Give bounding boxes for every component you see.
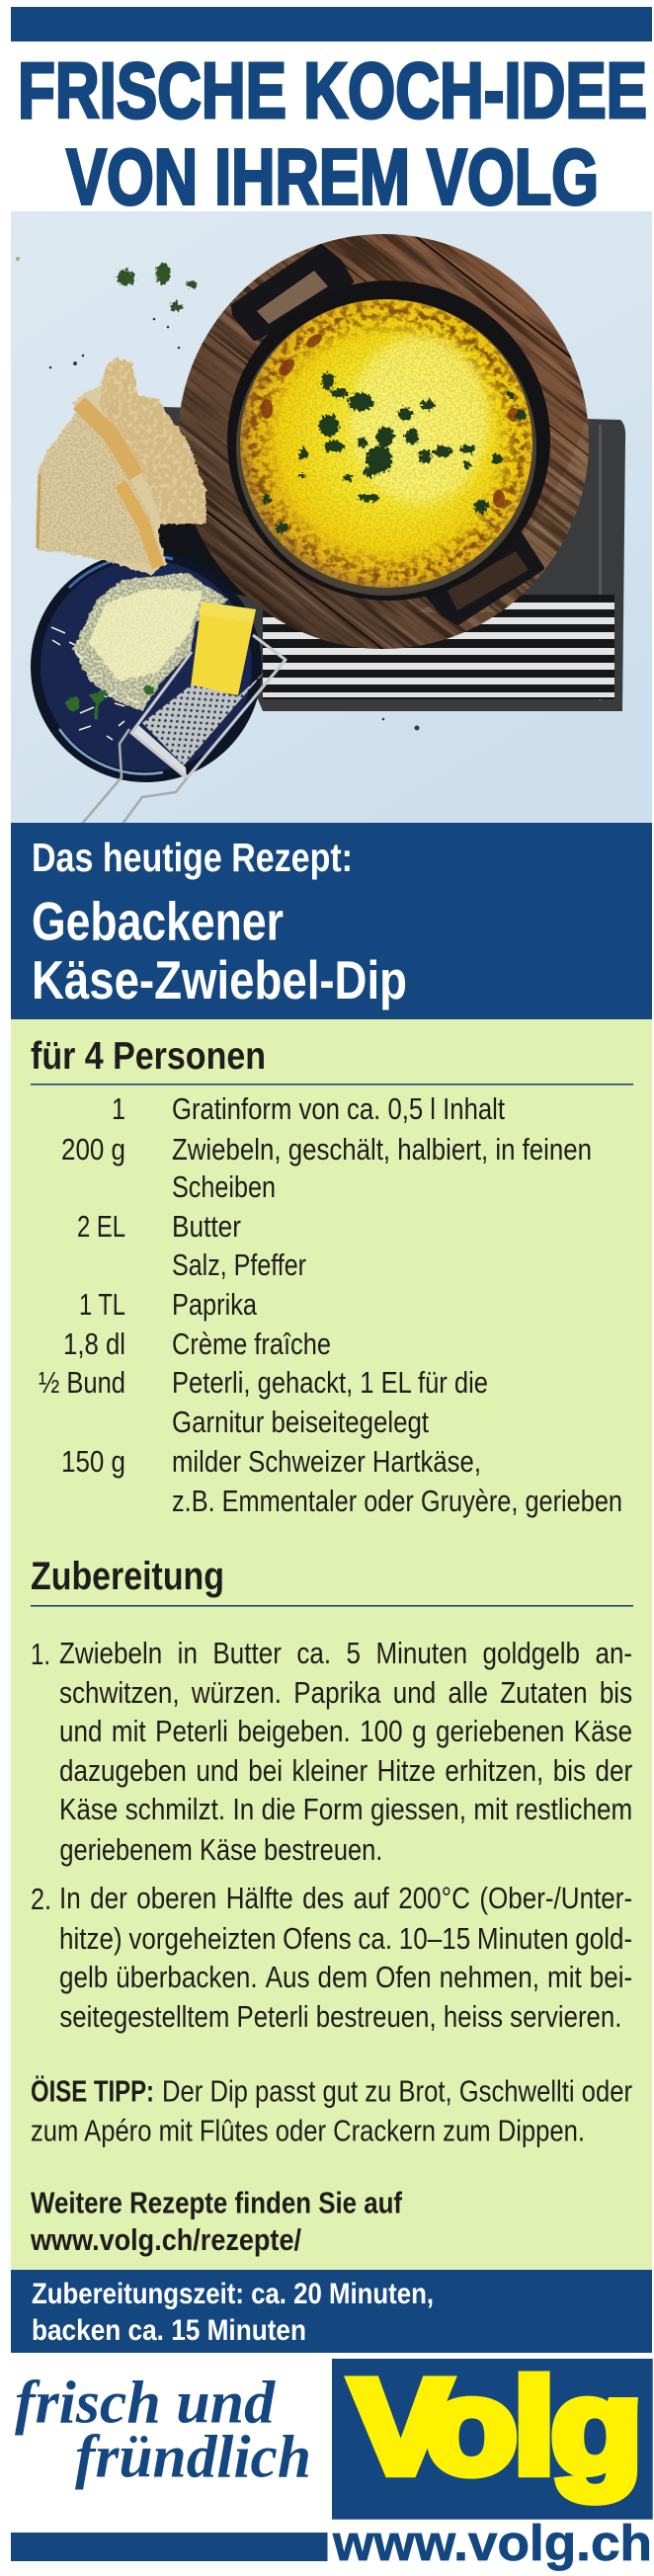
- recipe infographic page: oberen: [137, 1881, 217, 1915]
- recipe infographic page: schmilzt.: [125, 1792, 225, 1826]
- ingredient list: 2 EL: [77, 1209, 125, 1244]
- ingredient list: Paprika: [172, 1287, 258, 1322]
- recipe infographic page: 200°C: [399, 1881, 470, 1915]
- recipe infographic page: bei: [249, 1753, 283, 1788]
- ingredient list: milder Schweizer Hartkäse,: [172, 1444, 481, 1479]
- loose parsley: [117, 263, 197, 311]
- recipe infographic page: g: [412, 1714, 427, 1748]
- photo: baked cheese and onion dip: [11, 211, 652, 823]
- recipe infographic page: goldgelb: [483, 1636, 580, 1670]
- recipe infographic page: der: [91, 1881, 127, 1915]
- step numbers and closing lines: 2.: [31, 1882, 51, 1916]
- recipe infographic page: Ofens: [284, 1921, 352, 1956]
- recipe infographic page: des: [303, 1881, 345, 1915]
- recipe infographic page: mit: [112, 1714, 146, 1748]
- recipe infographic page: bis: [600, 1675, 633, 1710]
- recipe infographic page: bis: [553, 1753, 586, 1788]
- panel: preparation time: Zubereitungszeit: ca. 20 Minuten,: [32, 2278, 434, 2310]
- recipe infographic page: In: [233, 1792, 255, 1826]
- recipe infographic page: 5: [347, 1636, 361, 1670]
- pan handles: [234, 247, 541, 622]
- grated cheese: [51, 573, 228, 740]
- plate parsley: [66, 685, 153, 719]
- top blue bar: [11, 7, 652, 41]
- recipe infographic page: In: [59, 1881, 81, 1915]
- recipe infographic page: vorgeheizten: [129, 1921, 277, 1956]
- ingredient list: ½ Bund: [39, 1365, 125, 1400]
- recipe infographic page: Hälfte: [226, 1881, 293, 1915]
- recipe infographic page: mit: [547, 1960, 582, 1994]
- recipe infographic page: Zwiebeln: [59, 1636, 163, 1670]
- recipe infographic page: dem: [318, 1960, 368, 1994]
- panel: preparation time: [11, 2270, 652, 2353]
- heading: for 4 persons: für 4 Personen: [31, 1035, 266, 1078]
- parsley on dip: [263, 372, 526, 533]
- more recipes link: Weitere Rezepte finden Sie auf: [31, 2186, 403, 2220]
- recipe infographic page: mit: [474, 1792, 508, 1826]
- more recipes link: [30, 2186, 403, 2257]
- recipe infographic page: überbacken.: [117, 1960, 258, 1994]
- website: www.volg.ch: [332, 2515, 652, 2571]
- recipe name: Käse-Zwiebel-Dip: [32, 949, 407, 1010]
- recipe infographic page: gelb: [59, 1960, 109, 1994]
- recipe infographic page: und: [197, 1753, 239, 1788]
- recipe infographic page: Ofen: [376, 1960, 432, 1994]
- recipe infographic page: Käse: [59, 1792, 119, 1826]
- step numbers and closing lines: 1.: [31, 1637, 50, 1671]
- recipe infographic page: 10–15: [399, 1921, 471, 1956]
- recipe infographic page: Aus: [266, 1960, 310, 1994]
- recipe infographic page: restlichem: [516, 1792, 633, 1826]
- recipe infographic page: Zutaten: [501, 1675, 588, 1710]
- text block: preparation step 2: [59, 1881, 633, 1994]
- step numbers and closing lines: geriebenem Käse bestreuen.: [59, 1832, 382, 1867]
- ingredient list: 1 TL: [79, 1287, 125, 1322]
- recipe infographic page: alle: [449, 1675, 488, 1710]
- recipe infographic page: Butter: [213, 1636, 282, 1670]
- slogan: fründlich: [75, 2424, 311, 2490]
- grater: [82, 635, 286, 824]
- kicker: Das heutige Rezept:: [32, 835, 353, 880]
- recipe infographic page: kleiner: [292, 1753, 368, 1788]
- recipe infographic page: auf: [354, 1881, 389, 1915]
- recipe infographic page: in: [178, 1636, 198, 1670]
- wooden board: [178, 234, 589, 649]
- recipe infographic page: würzen.: [192, 1675, 282, 1710]
- ingredient list: Salz, Pfeffer: [172, 1248, 306, 1282]
- panel: recipe title: [11, 823, 652, 1019]
- panel: green recipe background: [11, 1019, 652, 2270]
- ingredient list: Garnitur beiseitegelegt: [172, 1405, 429, 1439]
- ingredient list: Crème fraîche: [172, 1327, 331, 1361]
- recipe infographic page: Peterli: [155, 1714, 228, 1748]
- recipe infographic page: der: [596, 1753, 633, 1788]
- recipe infographic page: und: [393, 1675, 437, 1710]
- recipe infographic page: Minuten: [376, 1636, 467, 1670]
- more recipes link: www.volg.ch/rezepte/: [30, 2222, 301, 2257]
- ingredient list: 1,8 dl: [63, 1327, 125, 1361]
- recipe infographic page: schwitzen,: [59, 1675, 180, 1710]
- title: [18, 46, 647, 221]
- pan: [227, 281, 550, 601]
- recipe infographic page: und: [59, 1714, 103, 1748]
- slogan: [15, 2371, 311, 2490]
- tip: ÖISE TIPP:: [31, 2074, 154, 2109]
- recipe infographic page: 100: [361, 1714, 403, 1748]
- bottom blue bar: [11, 2533, 328, 2561]
- recipe infographic page: Form: [303, 1792, 364, 1826]
- recipe infographic page: beigeben.: [238, 1714, 351, 1748]
- text block: preparation step 1: [59, 1636, 633, 1826]
- recipe infographic page: bei-: [590, 1960, 633, 1994]
- recipe name: [32, 891, 407, 1010]
- recipe infographic page: die: [262, 1792, 296, 1826]
- napkin: [163, 407, 625, 711]
- ingredient list: Peterli, gehackt, 1 EL für die: [172, 1365, 488, 1400]
- recipe infographic page: erhitzen,: [446, 1753, 544, 1788]
- ingredient list: [39, 1091, 622, 1518]
- ingredient list: 200 g: [61, 1132, 125, 1167]
- shadow beside bread: [158, 523, 247, 597]
- slogan: frisch und: [15, 2371, 277, 2437]
- step numbers and closing lines: [31, 1637, 621, 2034]
- ingredient list: Scheiben: [172, 1169, 276, 1204]
- recipe infographic page: hitze): [59, 1921, 123, 1956]
- recipe infographic page: (Ober-/Unter-: [480, 1881, 633, 1915]
- cheese block: [191, 602, 256, 695]
- recipe infographic page: ca.: [359, 1921, 392, 1956]
- plate: [31, 551, 262, 782]
- ingredient list: Butter: [172, 1209, 241, 1244]
- recipe infographic page: Käse: [574, 1714, 633, 1748]
- ingredient list: 150 g: [61, 1444, 125, 1479]
- ingredient list: 1: [112, 1091, 125, 1126]
- recipe infographic page: geriebenen: [436, 1714, 565, 1748]
- pepper specks: [16, 257, 419, 731]
- dip surface: [240, 299, 532, 588]
- recipe infographic page: giessen,: [370, 1792, 466, 1826]
- recipe name: Gebackener: [32, 891, 284, 952]
- bread: [37, 359, 205, 575]
- recipe infographic page: gold-: [576, 1921, 633, 1956]
- recipe infographic page: an-: [596, 1636, 632, 1670]
- recipe infographic page: nehmen,: [440, 1960, 539, 1994]
- panel: preparation time: backen ca. 15 Minuten: [32, 2314, 306, 2347]
- recipe infographic page: ca.: [297, 1636, 331, 1670]
- recipe infographic page: Paprika: [294, 1675, 381, 1710]
- recipe infographic page: Hitze: [377, 1753, 436, 1788]
- tip: [31, 2074, 632, 2148]
- recipe infographic page: dazugeben: [59, 1753, 187, 1788]
- recipe infographic page: Minuten: [477, 1921, 569, 1956]
- ingredient list: Gratinform von ca. 0,5 l Inhalt: [172, 1091, 505, 1126]
- logo: Volg: Volg: [351, 2353, 642, 2501]
- heading: preparation: Zubereitung: [31, 1555, 224, 1598]
